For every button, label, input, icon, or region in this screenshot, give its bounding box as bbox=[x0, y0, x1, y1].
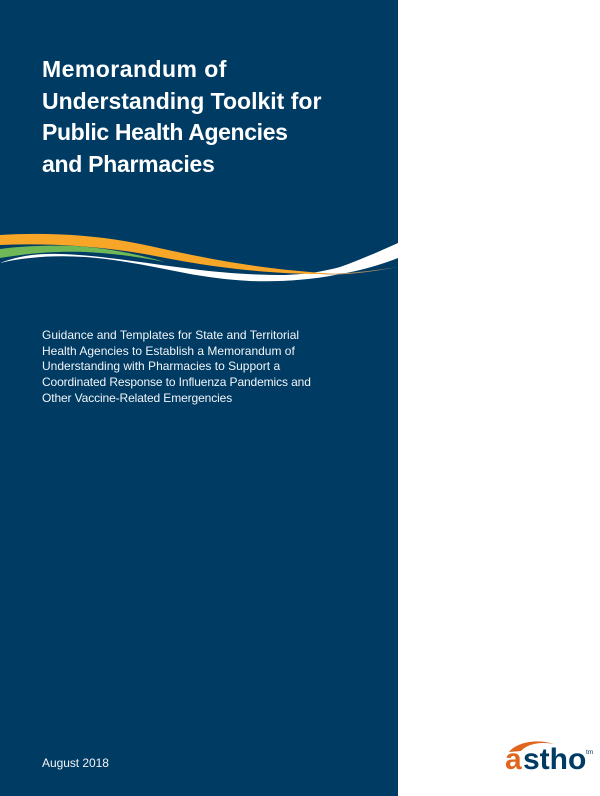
title: Understanding Toolkit for bbox=[42, 88, 321, 114]
subtitle text block: Understanding with Pharmacies to Support a bbox=[42, 359, 280, 373]
graphic: decorative swoosh wave bbox=[0, 234, 398, 282]
title: Public Health Agencies bbox=[42, 119, 288, 145]
panel: navy cover background bbox=[0, 0, 398, 796]
subtitle text block: Coordinated Response to Influenza Pandemics and bbox=[42, 375, 311, 389]
subtitle text block bbox=[42, 328, 311, 405]
trademark: tm bbox=[586, 749, 593, 756]
title: and Pharmacies bbox=[42, 151, 214, 177]
date: August 2018 bbox=[42, 756, 109, 770]
title bbox=[42, 56, 322, 177]
subtitle text block: Guidance and Templates for State and Territorial bbox=[42, 328, 299, 342]
icon: orange logo arc bbox=[509, 741, 554, 752]
subtitle text block: Health Agencies to Establish a Memorandum of bbox=[42, 344, 295, 358]
title: Memorandum of bbox=[42, 56, 227, 82]
subtitle text block: Other Vaccine-Related Emergencies bbox=[42, 391, 232, 405]
logo: astho bbox=[505, 741, 593, 775]
